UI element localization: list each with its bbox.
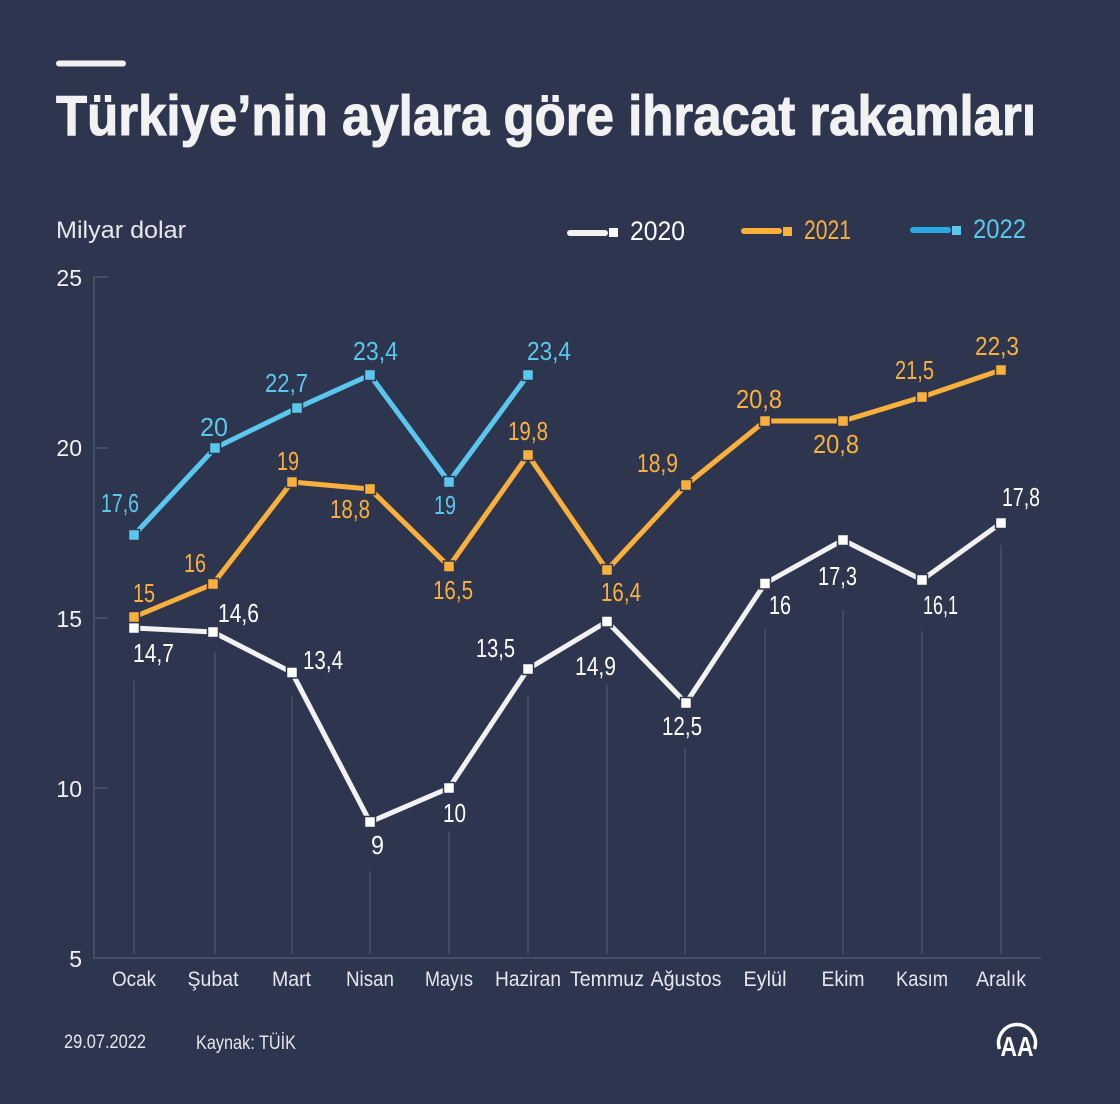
value labels: 2021: 16,5 xyxy=(433,575,473,605)
unit label: Milyar dolar xyxy=(56,217,186,244)
x axis month labels: Temmuz xyxy=(570,968,644,991)
x axis month labels: Eylül xyxy=(744,968,786,991)
value labels: 2022: 19 xyxy=(434,490,456,520)
value labels: 2020: 14,9 xyxy=(575,651,616,681)
title: Türkiye’nin aylara göre ihracat rakamları xyxy=(56,84,1036,148)
value labels: 2021: 18,8 xyxy=(330,494,370,524)
value labels: 2020: 14,6 xyxy=(218,598,259,628)
value labels: 2020: 14,7 xyxy=(133,638,174,668)
value labels: 2020: 16,1 xyxy=(923,590,958,620)
x axis month labels: Haziran xyxy=(495,968,561,991)
value labels: 2020: 13,4 xyxy=(303,645,343,675)
x axis month labels: Ağustos xyxy=(650,968,722,991)
icon: AA logo xyxy=(999,1024,1036,1062)
value labels: 2022 xyxy=(101,336,571,520)
x axis month labels: Kasım xyxy=(896,968,948,991)
legend: 2021: 2021 xyxy=(804,215,851,245)
value labels: 2021 xyxy=(133,331,1019,608)
value labels: 2021: 19 xyxy=(277,446,299,476)
x axis month labels xyxy=(112,968,1026,991)
value labels: 2022: 23,4 xyxy=(353,336,398,366)
y axis labels: 25 xyxy=(56,265,82,291)
chart axes xyxy=(94,277,1041,958)
legend xyxy=(567,214,1026,246)
series: 2021 line xyxy=(128,364,1006,622)
value labels: 2020: 17,3 xyxy=(818,561,857,591)
series: 2020 line xyxy=(128,518,1006,828)
y axis labels: 20 xyxy=(56,435,82,461)
x axis month labels: Mart xyxy=(272,968,311,991)
icon: AA logo: AA xyxy=(1000,1031,1034,1062)
source: Kaynak: TÜİK xyxy=(196,1033,296,1054)
y axis labels: 10 xyxy=(56,776,82,802)
series: 2022 line xyxy=(128,370,534,540)
value labels: 2021: 19,8 xyxy=(508,416,548,446)
legend: 2022: 2022 xyxy=(973,214,1026,244)
x axis month labels: Nisan xyxy=(346,968,394,991)
value labels: 2021: 16,4 xyxy=(601,577,641,607)
legend: 2022 xyxy=(910,214,1026,244)
value labels: 2020: 12,5 xyxy=(662,711,702,741)
value labels: 2020: 16 xyxy=(769,590,791,620)
value labels: 2022: 22,7 xyxy=(265,368,308,398)
value labels: 2022: 17,6 xyxy=(101,488,139,518)
title accent bar xyxy=(56,60,126,66)
x axis month labels: Mayıs xyxy=(425,968,473,991)
legend: 2020: 2020 xyxy=(630,216,685,246)
date: 29.07.2022 xyxy=(64,1032,146,1053)
value labels: 2022: 20 xyxy=(200,412,228,442)
y axis labels xyxy=(56,265,82,972)
value labels: 2021: 20,8 xyxy=(736,384,782,414)
y axis labels: 5 xyxy=(69,946,82,972)
value labels: 2020 xyxy=(133,482,1040,860)
month drop lines xyxy=(134,545,1001,954)
x axis month labels: Şubat xyxy=(188,968,239,991)
legend: 2020 xyxy=(567,216,685,246)
x axis month labels: Ekim xyxy=(822,968,864,991)
value labels: 2020: 13,5 xyxy=(476,633,515,663)
value labels: 2021: 21,5 xyxy=(895,355,934,385)
y axis labels: 15 xyxy=(56,606,82,632)
value labels: 2020: 9 xyxy=(371,830,384,860)
value labels: 2021: 16 xyxy=(184,548,206,578)
x axis month labels: Ocak xyxy=(112,968,156,991)
legend: 2021 xyxy=(741,215,851,245)
value labels: 2020: 10 xyxy=(443,798,466,828)
value labels: 2021: 22,3 xyxy=(975,331,1019,361)
value labels: 2021: 20,8 xyxy=(813,429,859,459)
value labels: 2021: 18,9 xyxy=(637,448,678,478)
value labels: 2020: 17,8 xyxy=(1002,482,1040,512)
x axis month labels: Aralık xyxy=(976,968,1026,991)
value labels: 2021: 15 xyxy=(133,578,155,608)
value labels: 2022: 23,4 xyxy=(527,336,571,366)
